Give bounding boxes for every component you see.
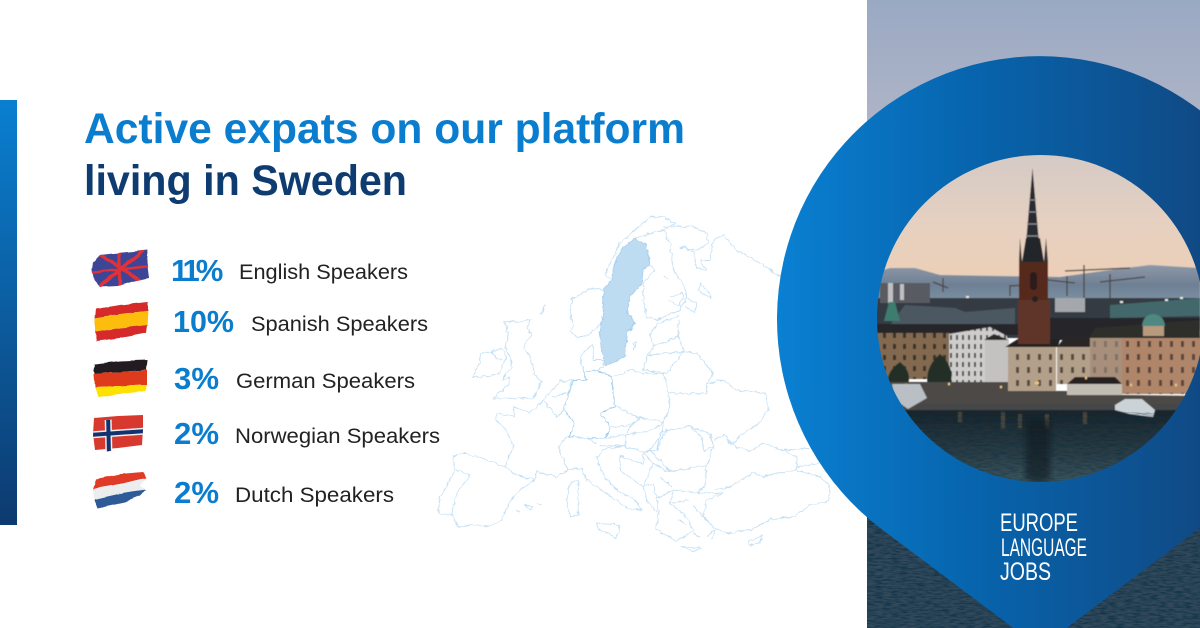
sea <box>867 500 1200 628</box>
Finland and Kola <box>643 227 780 320</box>
percentage: 11% <box>171 253 223 288</box>
trees <box>888 354 952 386</box>
Gotland and Oland <box>625 342 636 357</box>
title <box>84 105 685 205</box>
France <box>495 400 568 480</box>
lights <box>905 378 1177 387</box>
Great Britain <box>493 320 542 398</box>
Norway <box>570 217 675 338</box>
cranes <box>933 265 1145 298</box>
Benelux <box>543 380 572 417</box>
row: Dutch <box>93 472 394 510</box>
second central building <box>1056 346 1091 385</box>
percentage: 10% <box>173 304 234 339</box>
Baltic states <box>643 315 684 373</box>
sea ripple texture <box>867 500 1200 628</box>
icon: UK flag <box>90 250 150 288</box>
label: English Speakers <box>239 261 408 284</box>
central building <box>1008 347 1056 391</box>
quay <box>890 381 1185 411</box>
tower reflection <box>1026 420 1050 482</box>
percentage: 3% <box>174 361 219 396</box>
distant city <box>870 298 1200 338</box>
Spain and Portugal <box>438 453 535 527</box>
icon: Germany flag <box>93 360 147 397</box>
logo line 1: EUROPE <box>1000 509 1078 537</box>
label: Spanish Speakers <box>251 313 428 336</box>
Poland <box>613 370 670 422</box>
percentage: 2% <box>174 475 219 510</box>
title line 2: living in Sweden <box>84 157 407 205</box>
left ochre building <box>870 333 950 379</box>
green domed tower <box>1142 314 1165 326</box>
Romania and Moldova <box>650 433 713 472</box>
row: Norwegian <box>93 415 440 452</box>
icon: Netherlands flag <box>93 472 146 508</box>
language list <box>90 250 440 510</box>
row: English <box>90 250 408 288</box>
evening sky <box>884 155 1196 278</box>
right ferry <box>1115 399 1155 417</box>
Denmark <box>580 343 603 372</box>
Ireland <box>473 348 507 377</box>
logo line 2: LANGUAGE <box>1001 534 1087 562</box>
row: German <box>93 360 415 397</box>
label: Dutch Speakers <box>235 484 394 507</box>
percentage: 2% <box>174 416 219 451</box>
Germany <box>563 370 615 438</box>
Mediterranean islands <box>517 503 542 512</box>
Lakes <box>663 277 710 313</box>
map of Europe <box>438 217 838 552</box>
left ferry <box>892 384 927 409</box>
water ripple texture <box>908 412 1170 482</box>
building reflections <box>960 412 1085 428</box>
horizon haze <box>878 264 1200 298</box>
Czechia, Slovakia, Austria, Hungary <box>558 418 663 452</box>
Faroe islets <box>540 305 545 313</box>
right building <box>1090 336 1200 394</box>
label: German Speakers <box>236 370 415 393</box>
logo line 3: JOBS <box>1000 558 1051 586</box>
roofs <box>870 318 1200 340</box>
title line 1: Active expats on our platform <box>84 105 685 153</box>
label: Norwegian Speakers <box>235 425 440 448</box>
icon: Norway flag <box>93 415 143 452</box>
Sweden highlighted <box>600 238 650 365</box>
sky <box>867 0 1200 330</box>
Cyprus, Crete and Greek islands <box>670 500 763 552</box>
location pin shape <box>777 56 1200 628</box>
Stockholm photo in circle <box>870 150 1200 485</box>
icon: Spain flag <box>95 302 148 341</box>
white building <box>949 327 1007 383</box>
Riddarholmen church tower <box>1018 168 1050 344</box>
Belarus, Ukraine, Russia <box>662 352 810 452</box>
logo <box>1000 509 1087 586</box>
row: Spanish <box>95 302 428 341</box>
Caucasus <box>783 450 838 487</box>
white annex <box>985 340 1009 385</box>
photo panel background <box>867 0 1200 628</box>
Balkans <box>607 430 707 542</box>
water <box>905 410 1176 482</box>
small waterfront building <box>1066 383 1123 396</box>
Italy <box>567 448 642 538</box>
left accent bar <box>0 100 17 525</box>
Turkey <box>697 470 830 533</box>
